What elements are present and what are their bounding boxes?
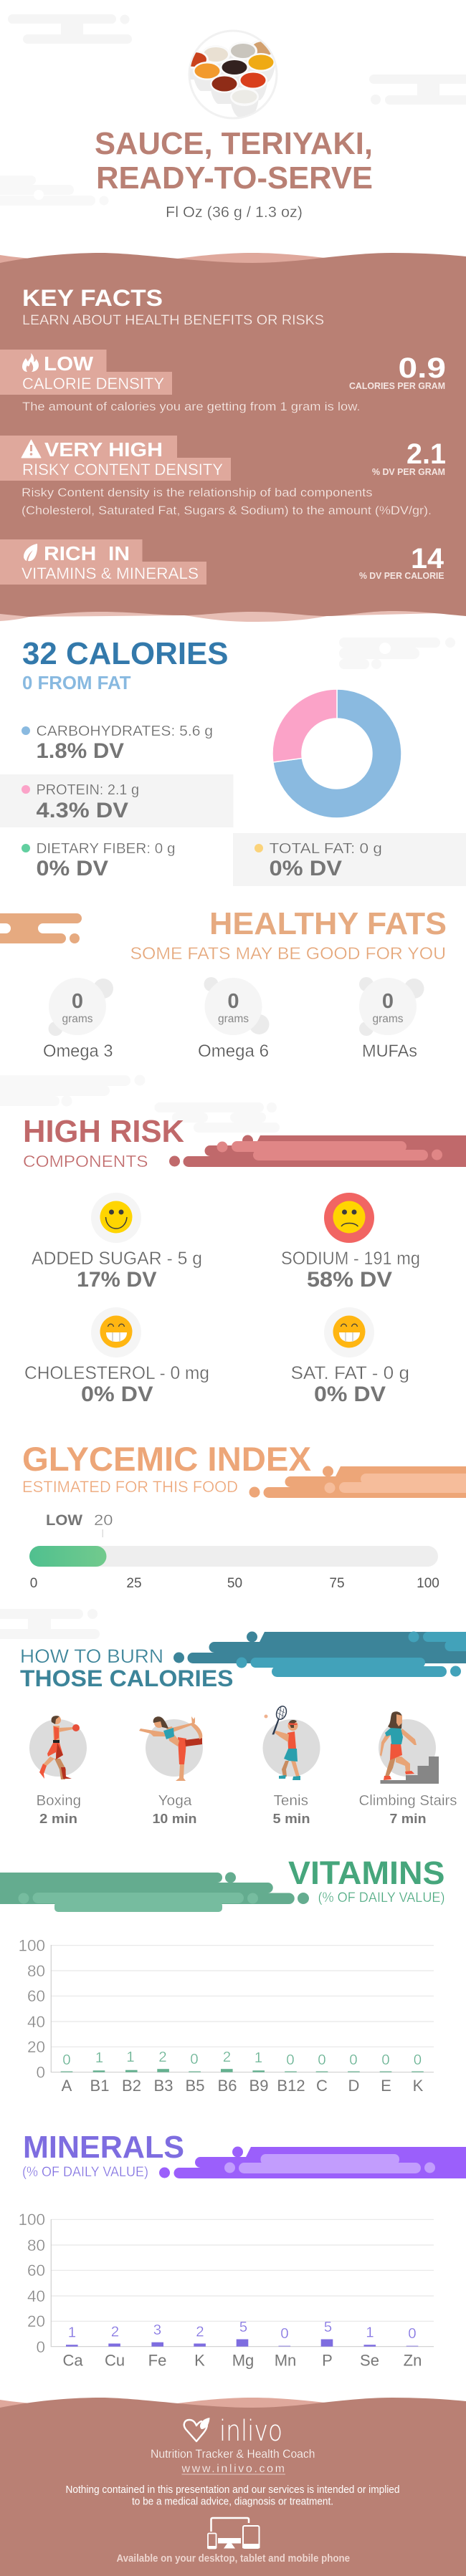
y axis labels: 60 — [27, 2262, 45, 2279]
unit: calories per gram: CALORIES PER GRAM — [349, 380, 445, 391]
icon: yoga figure — [139, 1716, 202, 1781]
icon: tennis player — [264, 1705, 300, 1780]
icon: grinning face — [100, 1315, 132, 1348]
bar values: 5 — [239, 2319, 247, 2335]
description: The amount of calories you are getting from 1 gram is low. — [22, 400, 361, 413]
category labels: A — [62, 2077, 72, 2095]
y axis labels — [18, 1937, 45, 2082]
label: risky content density: RISKY CONTENT DENSITY — [22, 461, 223, 479]
nutrient: dietary fiber: 0% DV — [36, 857, 108, 880]
nutrient: protein: PROTEIN: 2.1 g — [36, 782, 139, 798]
y axis labels: 0 — [36, 2063, 45, 2082]
activity: yoga: 10 min — [152, 1812, 196, 1826]
subheading: components: COMPONENTS — [23, 1152, 148, 1171]
label: calorie density: CALORIE DENSITY — [22, 375, 164, 393]
nutrient: total fat: TOTAL FAT: 0 g — [270, 840, 382, 857]
nutrient: dietary fiber — [22, 840, 175, 880]
category labels: Mg — [232, 2351, 254, 2370]
bar values: 0 — [318, 2052, 326, 2068]
bar values: 1 — [95, 2049, 103, 2066]
panel: footer — [0, 2398, 466, 2576]
tagline: Nutrition Tracker & Health Coach — [151, 2448, 315, 2461]
bar values: 1 — [366, 2324, 374, 2341]
risk item: added sugar: 17% DV — [77, 1268, 156, 1292]
gauge scale — [30, 1576, 439, 1591]
risk item: saturated fat: 0% DV — [314, 1383, 386, 1406]
label: very high: VERY HIGH — [44, 438, 163, 461]
category labels: E — [381, 2077, 391, 2095]
background cloud: burn section — [0, 1609, 100, 1639]
risk item: sodium: SODIUM - 191 mg — [281, 1249, 420, 1269]
y axis labels: 100 — [18, 2211, 45, 2229]
heading: high risk: HIGH RISK — [23, 1114, 184, 1149]
nutrient: total fat — [233, 833, 466, 886]
bar values: 3 — [153, 2322, 161, 2338]
decoration: glycemic blob — [249, 1466, 466, 1498]
category labels: P — [322, 2351, 333, 2370]
icon: woman climbing — [380, 1711, 417, 1780]
title: SAUCE, TERIYAKI, — [95, 126, 373, 161]
y axis labels: 40 — [27, 2287, 45, 2305]
heading: key facts: KEY FACTS — [22, 285, 163, 311]
subheading: healthy fats: SOME FATS MAY BE GOOD FOR YOU — [130, 944, 446, 963]
category labels: Fe — [148, 2351, 166, 2370]
gauge scale: 50 — [227, 1576, 242, 1591]
bar values: 0 — [408, 2325, 417, 2342]
bar values: 0 — [280, 2325, 289, 2342]
heading: vitamins: VITAMINS — [288, 1855, 444, 1891]
heading: how to burn: HOW TO BURN — [20, 1645, 163, 1667]
y axis labels: 20 — [27, 2038, 45, 2056]
icon: flame — [22, 353, 39, 372]
donut chart: calorie breakdown — [272, 689, 401, 818]
category labels: K — [413, 2077, 424, 2095]
unit: % dv per calorie: % DV PER CALORIE — [359, 570, 444, 581]
category labels: Zn — [404, 2351, 422, 2370]
fact: rich in vitamins and minerals — [0, 539, 444, 585]
nutrient: dietary fiber: DIETARY FIBER: 0 g — [36, 840, 175, 857]
y axis labels: 40 — [27, 2013, 45, 2031]
heading: glycemic index: GLYCEMIC INDEX — [22, 1440, 311, 1478]
icon: frowning face — [333, 1201, 366, 1234]
bar values — [68, 2319, 417, 2342]
bar values: 0 — [381, 2052, 390, 2068]
bar values: 2 — [111, 2324, 119, 2340]
fat: mufas — [359, 977, 424, 1061]
fat: omega 6: 0 — [227, 990, 239, 1013]
subheading: estimated: ESTIMATED FOR THIS FOOD — [22, 1478, 238, 1496]
fact: very high risky content density — [0, 436, 446, 517]
fat: omega 6 — [198, 977, 270, 1061]
category labels: B6 — [218, 2077, 237, 2095]
fat: omega 3 — [43, 978, 113, 1061]
disclaimer: Nothing contained in this presentation and our services is intended or implied — [66, 2484, 400, 2496]
nutrient: protein: 4.3% DV — [36, 799, 128, 822]
food image: sauce bowls — [180, 31, 277, 118]
activity: yoga — [139, 1716, 203, 1826]
y axis labels — [18, 2211, 45, 2356]
background cloud: high risk left — [0, 1075, 145, 1106]
icon: stairs — [380, 1756, 439, 1784]
activity: climbing stairs — [358, 1711, 457, 1826]
availability note: Available on your desktop, tablet and mobile phone — [116, 2552, 350, 2565]
label: low 20: 20 — [94, 1512, 113, 1529]
website link: www.inlivo.com — [181, 2463, 285, 2475]
category labels: Cu — [105, 2351, 125, 2370]
decoration: burn blob — [173, 1632, 466, 1677]
icon: warning triangle — [22, 440, 41, 458]
risk item: sodium: 58% DV — [307, 1268, 392, 1292]
y axis labels: 100 — [18, 1937, 45, 1954]
risk item: cholesterol — [24, 1307, 209, 1406]
description — [22, 486, 432, 517]
category labels — [62, 2351, 422, 2370]
risk item: sodium — [281, 1193, 420, 1292]
nutrient: carbohydrates — [22, 723, 213, 763]
bar values: 1 — [126, 2049, 135, 2065]
bar values: 2 — [196, 2324, 204, 2340]
gauge scale: 25 — [126, 1576, 142, 1591]
icon: leaf — [24, 544, 37, 561]
activity: tennis: Tenis — [274, 1793, 308, 1809]
heading: minerals: MINERALS — [23, 2130, 184, 2165]
activity: boxing: 2 min — [39, 1812, 77, 1826]
category labels: B1 — [90, 2077, 109, 2095]
description: (Cholesterol, Saturated Fat, Sugars & Sodium) to the amount (%DV/gr). — [22, 504, 432, 517]
heading: 32 calories: 32 CALORIES — [22, 636, 228, 671]
background cloud: calories — [339, 638, 455, 669]
bar values: 1 — [68, 2324, 76, 2341]
gauge scale: 100 — [417, 1576, 439, 1591]
risk item: added sugar: ADDED SUGAR - 5 g — [32, 1249, 202, 1269]
fat: omega 6: Omega 6 — [198, 1042, 269, 1061]
subheading: key facts: LEARN ABOUT HEALTH BENEFITS OR RISKS — [22, 312, 324, 328]
category labels: K — [194, 2351, 205, 2370]
label: low: LOW — [44, 352, 94, 375]
risk item: saturated fat — [291, 1307, 409, 1406]
bars — [66, 2340, 418, 2347]
activity: tennis — [262, 1705, 320, 1826]
category labels: Mn — [275, 2351, 296, 2370]
bar values: 0 — [62, 2052, 71, 2068]
disclaimer: to be a medical advice, diagnosis or treatment. — [132, 2496, 333, 2507]
description: Risky Content density is the relationship of bad components — [22, 486, 373, 499]
activity: climbing stairs: Climbing Stairs — [358, 1793, 457, 1809]
decoration: vitamins blob — [0, 1873, 309, 1912]
bar values: 0 — [414, 2052, 422, 2068]
fact: low calorie density — [0, 350, 446, 413]
nutrient: total fat: 0% DV — [270, 857, 342, 880]
category labels: B9 — [249, 2077, 268, 2095]
fat: omega 3: 0 — [72, 990, 83, 1013]
activity: tennis: 5 min — [272, 1812, 310, 1826]
title — [95, 126, 373, 196]
subheading: 0 from fat: 0 FROM FAT — [22, 673, 131, 693]
fat: omega 3: Omega 3 — [43, 1042, 113, 1061]
icon: heart with leaf — [184, 2418, 209, 2441]
disclaimer — [66, 2484, 400, 2507]
bar values — [62, 2049, 422, 2068]
y axis labels: 20 — [27, 2312, 45, 2330]
background cloud: top right — [369, 75, 466, 105]
glycemic gauge — [29, 1512, 439, 1591]
label: vitamins and minerals: VITAMINS & MINERALS — [22, 564, 199, 582]
logo: inlivo: inlivo — [219, 2415, 282, 2448]
icon: boxer — [39, 1716, 80, 1779]
fat: mufas: grams — [372, 1013, 404, 1025]
bar values: 1 — [255, 2049, 262, 2066]
bar values: 0 — [190, 2051, 199, 2067]
fat: mufas: 0 — [382, 990, 394, 1013]
y axis labels: 0 — [36, 2338, 45, 2356]
bar values: 2 — [223, 2049, 231, 2065]
label: low 20 — [46, 1512, 113, 1529]
value: 2.1: 2.1 — [406, 438, 446, 470]
bar values: 5 — [324, 2319, 332, 2335]
risk item: cholesterol: 0% DV — [81, 1383, 153, 1406]
category labels: B12 — [277, 2077, 305, 2095]
bar chart: minerals — [18, 2211, 434, 2370]
label: low 20: LOW — [46, 1512, 83, 1529]
value: 14: 14 — [411, 543, 444, 575]
nutrient: protein — [0, 774, 234, 827]
subheading: percent of daily value: (% OF DAILY VALUE) — [22, 2165, 148, 2180]
icon: grinning face — [333, 1315, 366, 1348]
bar values: 0 — [349, 2052, 358, 2068]
heading: those calories: THOSE CALORIES — [20, 1666, 234, 1691]
gauge bar — [29, 1546, 438, 1567]
category labels: B5 — [186, 2077, 204, 2095]
icon: smiling face — [100, 1201, 132, 1234]
category labels — [62, 2077, 424, 2095]
risk item: cholesterol: CHOLESTEROL - 0 mg — [24, 1363, 209, 1383]
risk item: saturated fat: SAT. FAT - 0 g — [291, 1363, 409, 1383]
decoration: high risk blob — [169, 1135, 466, 1167]
heading: healthy fats: HEALTHY FATS — [209, 906, 447, 941]
activity: boxing — [29, 1716, 87, 1826]
y axis labels: 60 — [27, 1987, 45, 2005]
gauge scale: 75 — [329, 1576, 345, 1591]
nutrient: carbohydrates: 1.8% DV — [36, 739, 124, 763]
nutrient: carbohydrates: CARBOHYDRATES: 5.6 g — [36, 723, 213, 739]
background cloud: left of title — [0, 176, 109, 206]
fat: omega 6: grams — [218, 1013, 249, 1025]
bars — [61, 2069, 424, 2072]
bar chart: vitamins — [18, 1937, 434, 2095]
label: rich in: RICH IN — [44, 542, 130, 564]
activity: climbing stairs: 7 min — [390, 1812, 426, 1826]
activity: boxing: Boxing — [36, 1793, 81, 1809]
category labels: B3 — [154, 2077, 173, 2095]
background cloud: top left — [8, 14, 132, 44]
y axis labels: 80 — [27, 1962, 45, 1980]
subheading: percent of daily value: (% OF DAILY VALUE) — [318, 1890, 444, 1905]
logo: inlivo — [184, 2415, 282, 2448]
category labels: Ca — [62, 2351, 83, 2370]
category labels: D — [348, 2077, 359, 2095]
title: READY-TO-SERVE — [96, 160, 373, 196]
category labels: B2 — [122, 2077, 141, 2095]
fat: mufas: MUFAs — [362, 1042, 417, 1061]
category labels: Se — [360, 2351, 379, 2370]
fat: omega 3: grams — [62, 1013, 93, 1025]
value: 0.9: 0.9 — [399, 352, 446, 384]
panel: key facts — [0, 253, 466, 622]
bar values: 2 — [158, 2049, 167, 2065]
unit: % dv per gram: % DV PER GRAM — [372, 466, 445, 477]
decoration: minerals blob — [159, 2146, 466, 2178]
decoration: healthy fats blob — [0, 913, 82, 943]
background cloud: high risk center — [155, 1102, 280, 1133]
category labels: C — [316, 2077, 328, 2095]
bar values: 0 — [286, 2052, 295, 2068]
activity: yoga: Yoga — [158, 1793, 192, 1809]
risk item: added sugar — [32, 1193, 202, 1292]
gauge scale: 0 — [30, 1576, 37, 1591]
serving size: Fl Oz (36 g / 1.3 oz) — [166, 204, 303, 221]
y axis labels: 80 — [27, 2236, 45, 2254]
icon: devices — [207, 2518, 260, 2549]
